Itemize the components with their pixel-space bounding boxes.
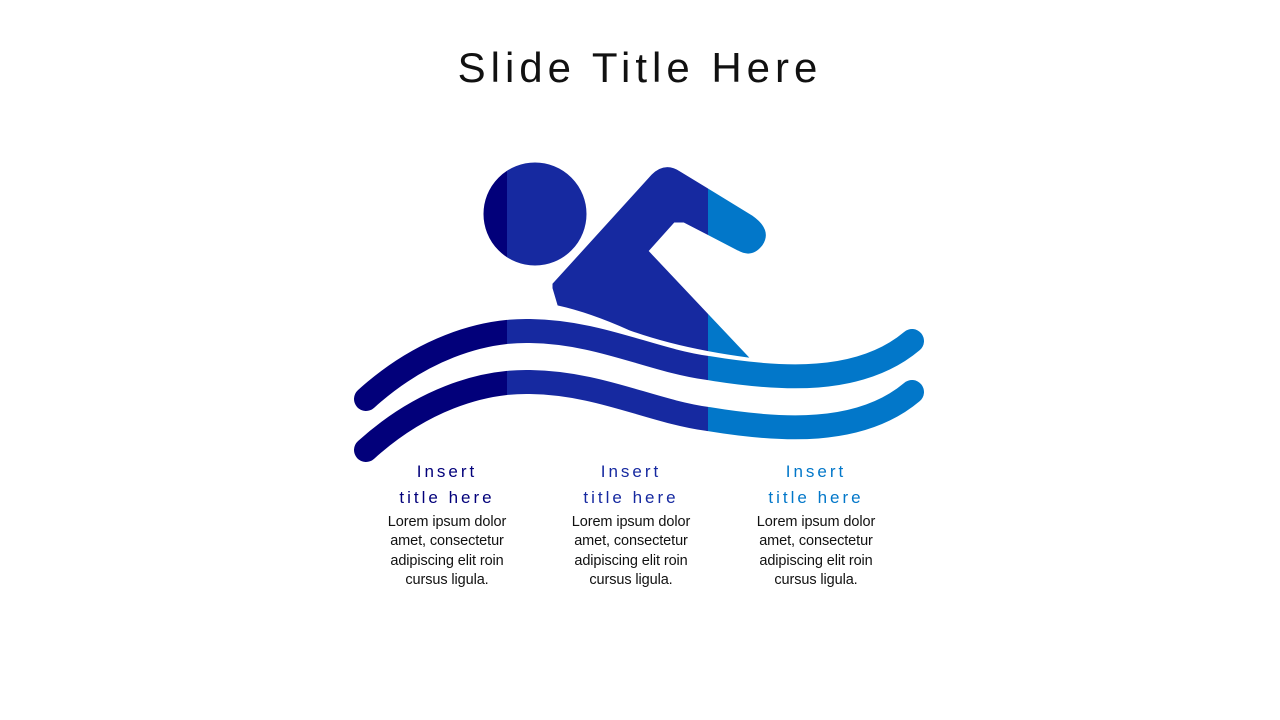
text block 1: cursus ligula. [405, 572, 489, 588]
text block 2 [572, 462, 690, 588]
title: Slide Title Here [458, 44, 822, 91]
text block 2: adipiscing elit roin [574, 553, 688, 569]
text block 3: cursus ligula. [774, 572, 858, 588]
swimmer illustration [354, 162, 924, 462]
text block 3: amet, consectetur [759, 533, 873, 549]
right section light [708, 188, 924, 440]
text block 3: Insert [786, 462, 846, 481]
text block 2: amet, consectetur [574, 533, 688, 549]
left section dark [354, 170, 507, 462]
text block 1: adipiscing elit roin [390, 553, 504, 569]
text block 1: Lorem ipsum dolor [388, 514, 506, 530]
text block 2: Insert [601, 462, 661, 481]
text block 3: title here [768, 488, 864, 507]
text block 2: cursus ligula. [589, 572, 673, 588]
text block 1 [388, 462, 506, 588]
text block 1: Insert [417, 462, 477, 481]
text block 3 [757, 462, 876, 588]
text block 1: amet, consectetur [390, 533, 504, 549]
text block 1: title here [399, 488, 495, 507]
text block 3: adipiscing elit roin [759, 553, 873, 569]
middle section [507, 162, 708, 432]
text block 2: Lorem ipsum dolor [572, 514, 690, 530]
text block 2: title here [583, 488, 679, 507]
text block 3: Lorem ipsum dolor [757, 514, 875, 530]
